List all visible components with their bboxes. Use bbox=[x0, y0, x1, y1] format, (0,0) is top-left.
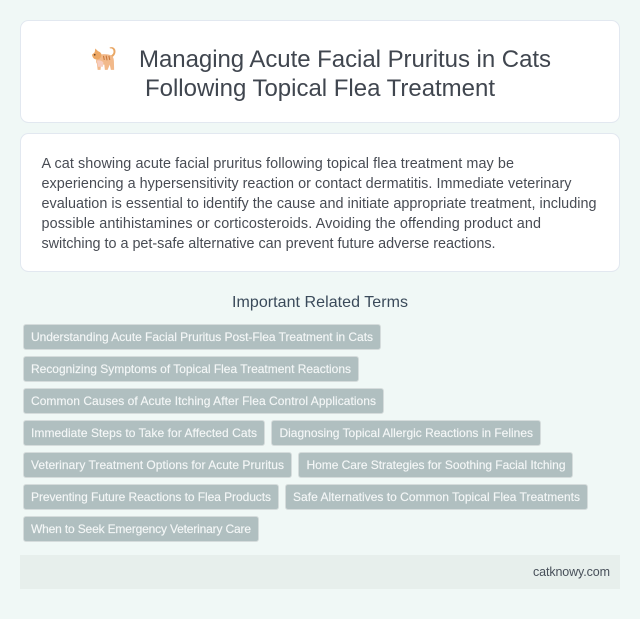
tag 3: Common Causes of Acute Itching After Flea Control Applications bbox=[31, 394, 376, 408]
tag 10: When to Seek Emergency Veterinary Care bbox=[31, 522, 251, 536]
panel: description card bbox=[20, 134, 620, 272]
description text bbox=[42, 156, 596, 252]
tag 3 bbox=[24, 388, 384, 414]
tag 2 bbox=[24, 356, 358, 382]
tag 4 bbox=[24, 420, 264, 446]
title text: Managing Acute Facial Pruritus in Cats bbox=[139, 46, 551, 73]
footer bbox=[20, 555, 620, 589]
tag 7 bbox=[298, 452, 572, 478]
icon: cat bbox=[92, 47, 116, 70]
description text: possible antihistamines or corticosteroids. Avoiding the offending product and bbox=[42, 216, 541, 232]
description text: evaluation is essential to identify the cause and initiate appropriate treatment, including bbox=[42, 196, 596, 212]
tag list bbox=[24, 324, 588, 542]
tag 6 bbox=[24, 452, 292, 478]
tag 2: Recognizing Symptoms of Topical Flea Treatment Reactions bbox=[31, 362, 351, 376]
title text: Following Topical Flea Treatment bbox=[145, 75, 495, 102]
title text bbox=[139, 46, 551, 102]
tag 6: Veterinary Treatment Options for Acute Pruritus bbox=[31, 458, 284, 472]
panel: title card bbox=[20, 20, 620, 122]
tag 4: Immediate Steps to Take for Affected Cats bbox=[31, 426, 257, 440]
tag 8: Preventing Future Reactions to Flea Products bbox=[31, 490, 271, 504]
footer: catknowy.com bbox=[533, 565, 610, 579]
tag 10 bbox=[24, 516, 258, 542]
description text: switching to a pet-safe alternative can prevent future adverse reactions. bbox=[42, 236, 496, 252]
tag 1 bbox=[24, 324, 380, 350]
tag 7: Home Care Strategies for Soothing Facial Itching bbox=[306, 458, 566, 472]
tag 9: Safe Alternatives to Common Topical Flea Treatments bbox=[293, 490, 580, 504]
tag 1: Understanding Acute Facial Pruritus Post-Flea Treatment in Cats bbox=[31, 330, 373, 344]
description text: experiencing a hypersensitivity reaction or contact dermatitis. Immediate veterinary bbox=[42, 176, 572, 192]
tag 5: Diagnosing Topical Allergic Reactions in Felines bbox=[280, 426, 533, 440]
tag 9 bbox=[286, 484, 588, 510]
heading: important related terms: Important Related Terms bbox=[232, 294, 408, 311]
description text: A cat showing acute facial pruritus following topical flea treatment may be bbox=[42, 156, 514, 172]
tag 5 bbox=[272, 420, 540, 446]
tag 8 bbox=[24, 484, 278, 510]
